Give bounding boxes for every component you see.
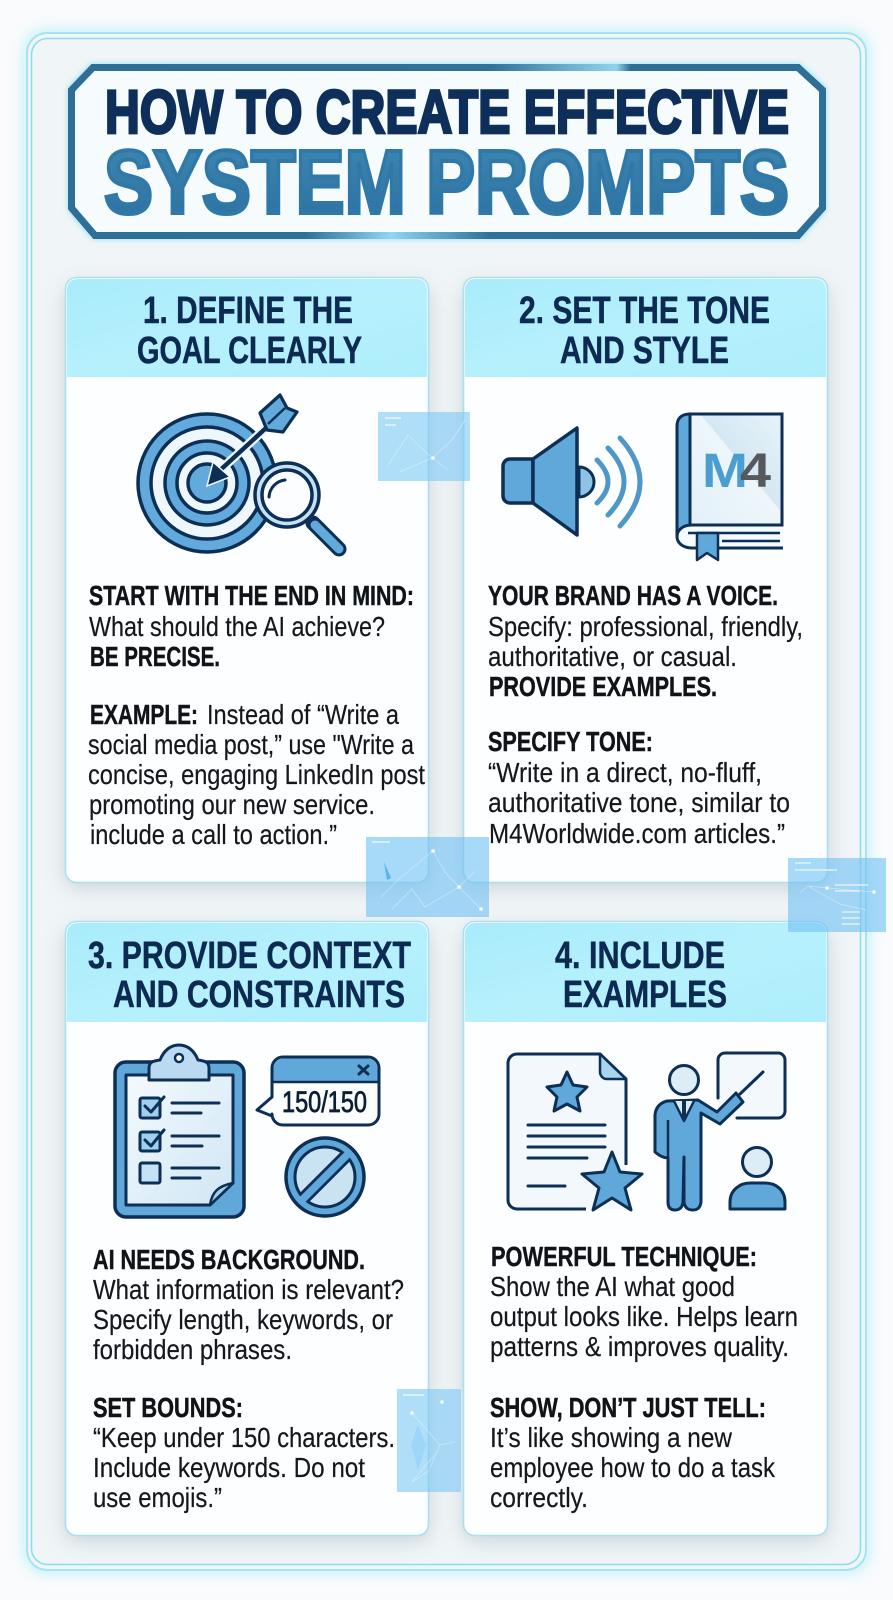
text block 1: [88, 580, 425, 850]
panel: 3 context and constraints: [65, 922, 429, 1541]
logo M4: [702, 445, 771, 498]
heading 2: [519, 290, 770, 372]
panel: 4 include examples: [463, 922, 828, 1541]
heading 3: 3. PROVIDE CONTEXT: [88, 935, 411, 977]
text block 4: SHOW, DON’T JUST TELL:: [490, 1392, 766, 1423]
text block 4: patterns & improves quality.: [490, 1331, 789, 1362]
overlay: network tile A: [378, 412, 470, 481]
text block 4: correctly.: [490, 1482, 588, 1513]
text block 2: authoritative tone, similar to: [488, 787, 790, 818]
text block 4: POWERFUL TECHNIQUE:: [491, 1241, 757, 1272]
text block 4: output looks like. Helps learn: [490, 1301, 798, 1332]
text block 1: promoting our new service.: [89, 789, 375, 820]
text block 1: What should the AI achieve?: [89, 611, 385, 642]
text block 3: Specify length, keywords, or: [93, 1304, 393, 1335]
header band 4: [465, 923, 826, 1022]
heading 4: EXAMPLES: [563, 974, 727, 1016]
text block 1: Instead of “Write a: [207, 699, 399, 730]
header band 2: [465, 279, 826, 377]
icon: presenter at board: [655, 1053, 785, 1210]
text block 3: SET BOUNDS:: [93, 1392, 243, 1423]
text block 2: YOUR BRAND HAS A VOICE.: [488, 580, 778, 611]
header band 1: [67, 279, 427, 377]
heading 2: AND STYLE: [560, 330, 729, 372]
heading 4: [555, 935, 727, 1016]
heading 3: [88, 935, 411, 1016]
icon: character counter bubble: 150/150: [282, 1086, 367, 1119]
icon: brand book: [677, 414, 783, 560]
heading 1: 1. DEFINE THE: [143, 290, 353, 332]
icon: learner: [730, 1148, 785, 1209]
text block 4: [490, 1241, 798, 1513]
icon: speaker: [503, 428, 640, 535]
text block 2: [488, 580, 803, 849]
icon: clipboard checklist: [115, 1045, 244, 1217]
overlay: network tile C: [788, 858, 886, 932]
logo M4: 4: [740, 445, 771, 498]
text block 3: What information is relevant?: [93, 1274, 404, 1305]
text block 4: It’s like showing a new: [490, 1422, 733, 1453]
text block 2: PROVIDE EXAMPLES.: [489, 671, 717, 702]
icon: document with stars: [508, 1054, 642, 1210]
panel: 1 define the goal: [65, 278, 429, 888]
text block 4: Show the AI what good: [490, 1271, 735, 1302]
text block 3: [93, 1244, 404, 1513]
text block 2: M4Worldwide.com articles.”: [489, 818, 785, 849]
text block 2: Specify: professional, friendly,: [488, 611, 803, 642]
text block 1: BE PRECISE.: [90, 641, 220, 672]
text block 1: EXAMPLE:: [90, 699, 198, 730]
text block 2: authoritative, or casual.: [488, 641, 737, 672]
icon: character counter bubble: [257, 1057, 379, 1125]
icon: prohibited sign: [286, 1138, 364, 1216]
heading 4: 4. INCLUDE: [555, 935, 725, 977]
text block 1: START WITH THE END IN MIND:: [89, 580, 414, 611]
text block 4: employee how to do a task: [490, 1452, 776, 1483]
overlay: network tile B: [366, 837, 489, 917]
header band 3: [67, 923, 427, 1022]
text block 3: use emojis.”: [93, 1482, 222, 1513]
heading 1: GOAL CLEARLY: [137, 330, 362, 372]
panel: 2 set the tone: [463, 278, 828, 888]
text block 1: concise, engaging LinkedIn post: [88, 759, 425, 790]
text block 3: Include keywords. Do not: [93, 1452, 365, 1483]
text block 2: SPECIFY TONE:: [488, 726, 653, 757]
logo M4: M: [702, 445, 748, 498]
text block 3: AI NEEDS BACKGROUND.: [93, 1244, 365, 1275]
text block 3: forbidden phrases.: [93, 1334, 292, 1365]
heading 2: 2. SET THE TONE: [519, 290, 770, 332]
heading 1: [137, 290, 362, 372]
text block 3: “Keep under 150 characters.: [93, 1422, 395, 1453]
heading 3: AND CONSTRAINTS: [113, 974, 405, 1016]
overlay: network tile D: [397, 1389, 461, 1492]
title banner: [68, 64, 826, 239]
text block 1: include a call to action.”: [90, 819, 337, 850]
text block 1: social media post,” use "Write a: [88, 729, 414, 760]
text block 2: “Write in a direct, no-fluff,: [488, 757, 762, 788]
icon: target with arrow and magnifier: [138, 395, 339, 552]
